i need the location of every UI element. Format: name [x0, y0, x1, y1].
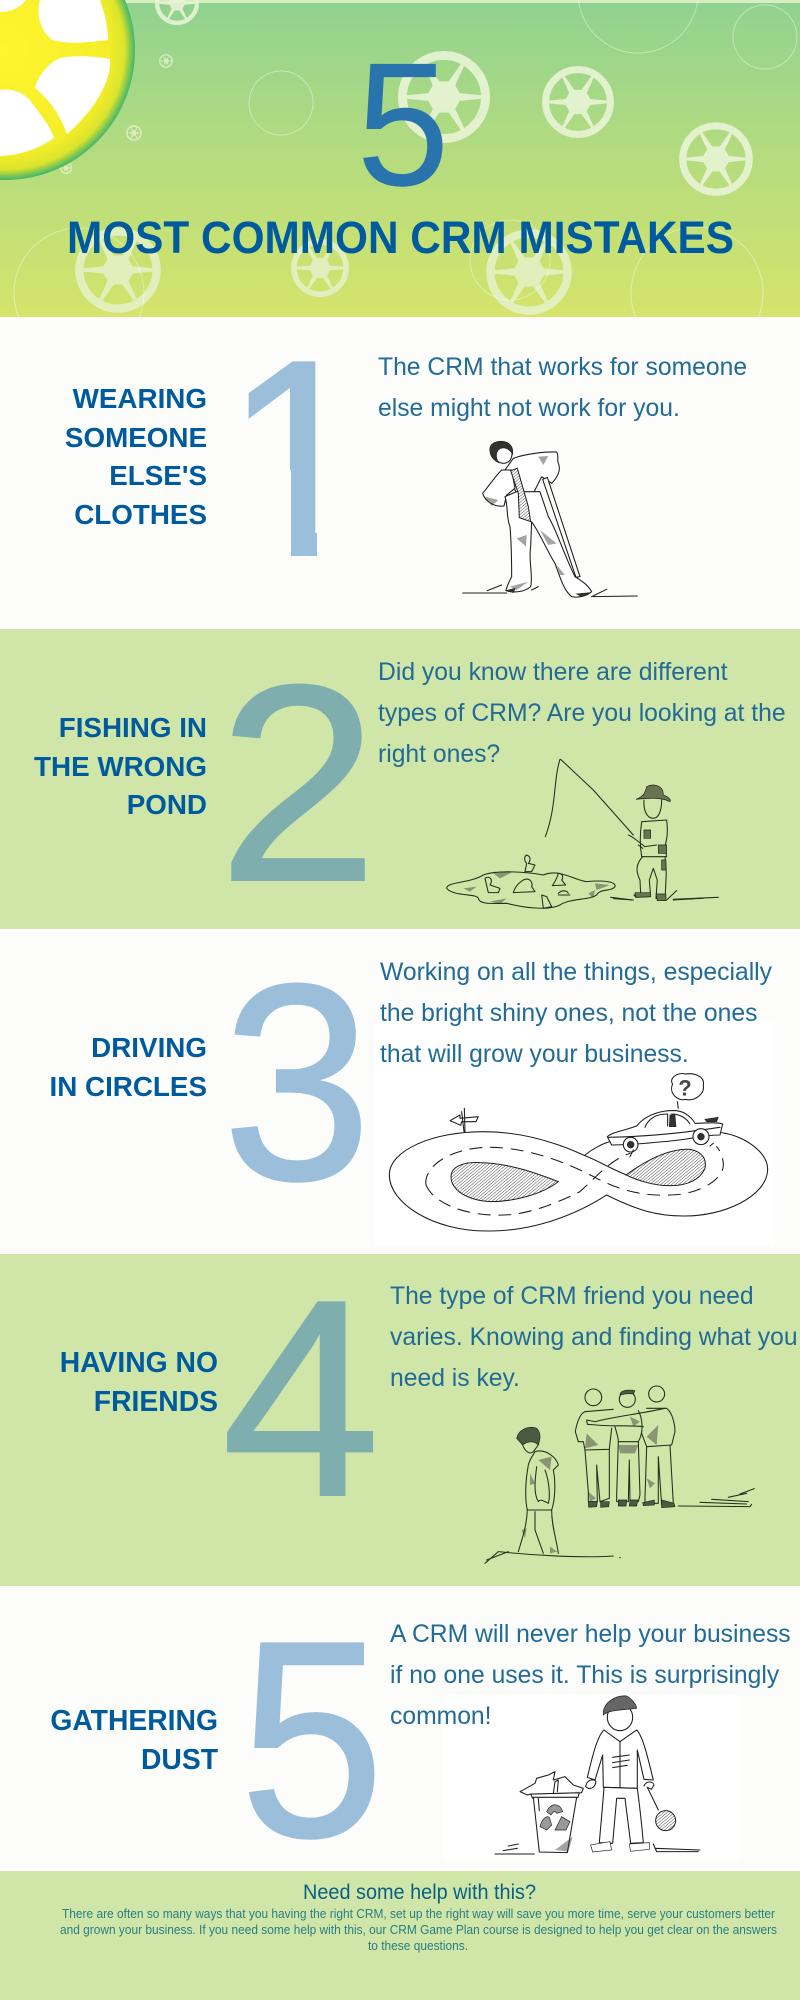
footer text: and grown your business. If you need some help with this, our CRM Game Plan course is designed to help you get clear on the answers — [60, 1923, 777, 1937]
heading: gathering dust: DUST — [141, 1743, 218, 1775]
heading: wearing someone else's clothes: CLOTHES — [74, 499, 207, 530]
title: MOST COMMON CRM MISTAKES — [67, 212, 734, 263]
heading: gathering dust: GATHERING — [50, 1704, 218, 1736]
number 2: 2 — [218, 628, 378, 940]
footer text: to these questions. — [368, 1939, 468, 1953]
illustration: fisherman at a polluted pond — [447, 759, 718, 908]
icon: question mark: ? — [678, 1075, 692, 1100]
panel: mistake 2 — [0, 628, 800, 940]
body text 1: else might not work for you. — [378, 395, 680, 422]
panel: mistake 4 — [0, 1242, 800, 1586]
heading: having no friends: HAVING NO — [60, 1346, 218, 1378]
number 3: 3 — [222, 927, 372, 1239]
panel: mistake 1 — [66, 357, 746, 598]
body text 5: if no one uses it. This is surprisingly — [390, 1662, 780, 1689]
body text 4: varies. Knowing and finding what you — [390, 1324, 798, 1351]
body text 5: A CRM will never help your business — [390, 1621, 791, 1648]
body text 2: Did you know there are different — [378, 659, 728, 686]
background wheels pattern — [14, 0, 797, 359]
title number 5: 5 — [357, 27, 449, 223]
footer text — [60, 1907, 777, 1953]
heading: driving in circles: IN CIRCLES — [49, 1071, 207, 1102]
panel: mistake 5 — [0, 1583, 800, 1896]
body text 4: The type of CRM friend you need — [390, 1283, 754, 1310]
illustration: car on an infinity road — [389, 1074, 768, 1231]
panel: mistake 3 — [0, 927, 800, 1254]
illustration: lonely person and group of friends — [485, 1386, 754, 1563]
heading: driving in circles: DRIVING — [91, 1032, 207, 1063]
heading: fishing in the wrong pond: THE WRONG — [34, 751, 207, 782]
body text 3: Working on all the things, especially — [380, 959, 773, 986]
footer heading: Need some help with this? — [303, 1881, 536, 1904]
body text 1: The CRM that works for someone — [378, 354, 747, 381]
heading: wearing someone else's clothes: WEARING — [73, 383, 207, 414]
body text 3: the bright shiny ones, not the ones — [380, 1000, 757, 1027]
illustration: man in oversized clothes — [463, 441, 637, 597]
illustration: person beside a recycling bin — [495, 1696, 700, 1854]
panel: header banner — [0, 0, 800, 359]
body text 3: that will grow your business. — [380, 1041, 689, 1068]
heading: fishing in the wrong pond: POND — [127, 789, 207, 820]
body text 2: types of CRM? Are you looking at the — [378, 700, 786, 727]
heading: having no friends: FRIENDS — [94, 1385, 218, 1417]
icon: signpost — [450, 1108, 478, 1132]
number 5: 5 — [240, 1583, 384, 1896]
heading: wearing someone else's clothes: SOMEONE — [65, 422, 207, 453]
body text 2: right ones? — [378, 741, 500, 768]
heading: fishing in the wrong pond: FISHING IN — [59, 712, 207, 743]
body text 5: common! — [390, 1703, 492, 1730]
icon: large yellow wheel — [0, 0, 135, 180]
heading: wearing someone else's clothes: ELSE'S — [109, 460, 207, 491]
body text 4: need is key. — [390, 1365, 520, 1392]
panel: footer call to action — [0, 1871, 800, 2000]
number 4: 4 — [222, 1242, 380, 1554]
footer text: There are often so many ways that you having the right CRM, set up the right way will save you more time, serve your customers better — [62, 1907, 775, 1921]
number 1: 1 — [224, 302, 372, 614]
